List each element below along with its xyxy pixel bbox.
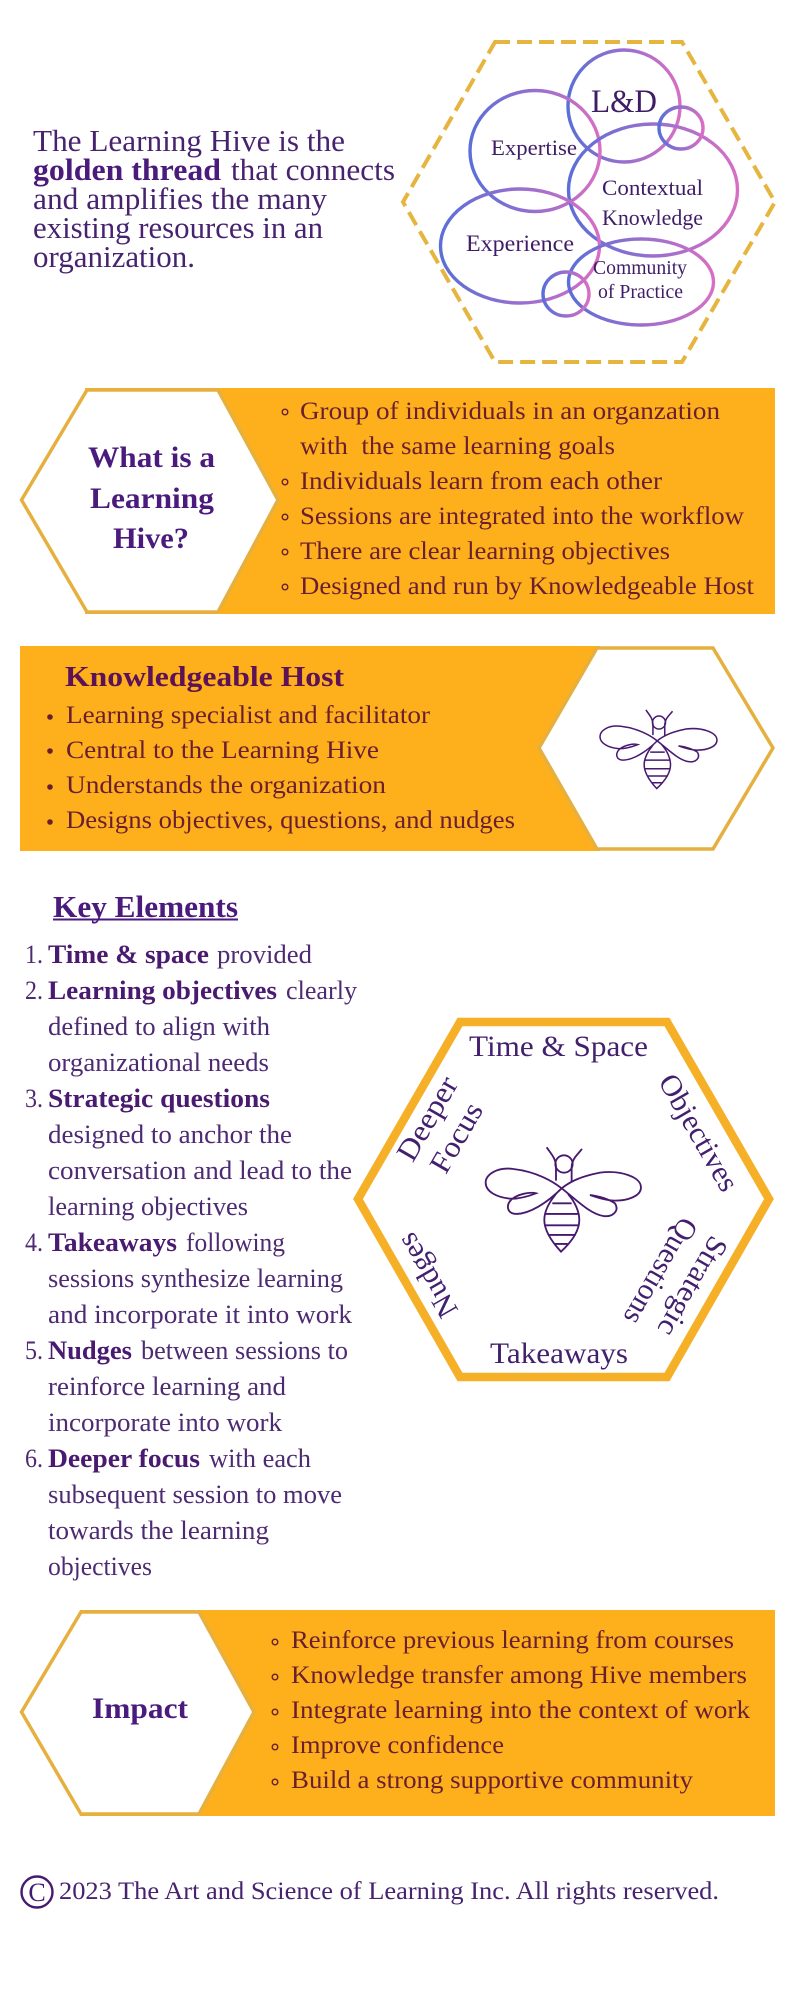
- white hexagon with heading: Impact: [92, 1692, 188, 1725]
- icon: copyright symbol: [22, 1876, 52, 1908]
- numbered list: key elements: with each: [209, 1444, 311, 1473]
- bullet list: Individuals learn from each other: [300, 468, 663, 495]
- orange band: [85, 388, 775, 614]
- numbered list: key elements: Takeaways: [48, 1228, 177, 1257]
- numbered list: key elements: 6.: [25, 1444, 43, 1473]
- white hexagon with heading: Hive?: [113, 522, 189, 555]
- label: deeper focus: [390, 1071, 490, 1179]
- bullet list: Group of individuals in an organzation: [300, 398, 721, 425]
- footer: copyright: [22, 1876, 719, 1908]
- numbered list: key elements: provided: [217, 940, 312, 969]
- numbered list: key elements: and incorporate it into work: [48, 1300, 352, 1329]
- icon: large bee: [486, 1147, 641, 1252]
- numbered list: key elements: Time & space: [48, 940, 209, 969]
- circles: [440, 50, 738, 325]
- bullet list: Improve confidence: [291, 1732, 504, 1759]
- bullet list: [272, 1627, 751, 1794]
- numbered list: key elements: sessions synthesize learning: [48, 1264, 343, 1293]
- panel: knowledgeable host: [20, 646, 773, 851]
- intro text: golden thread: [33, 152, 221, 187]
- label: objectives: Objectives: [652, 1068, 745, 1197]
- white hexagon with bee: [539, 648, 773, 849]
- numbered list: key elements: 4.: [25, 1228, 43, 1257]
- circle labels: L&D: [591, 84, 657, 120]
- bullet list: Build a strong supportive community: [291, 1767, 694, 1794]
- numbered list: key elements: subsequent session to move: [48, 1480, 342, 1509]
- numbered list: key elements: incorporate into work: [48, 1408, 282, 1437]
- panel: what is a learning hive: [22, 388, 775, 614]
- numbered list: key elements: Nudges: [48, 1336, 132, 1365]
- circle labels: Expertise: [491, 135, 577, 160]
- bullet list: [47, 702, 515, 834]
- bullet list: [282, 398, 754, 600]
- label: strategic questions: Strategic: [651, 1230, 734, 1342]
- numbered list: key elements: Deeper focus: [48, 1444, 200, 1473]
- intro text: and amplifies the many: [33, 181, 327, 216]
- label: time and space: Time & Space: [469, 1030, 648, 1063]
- bullet list: Knowledge transfer among Hive members: [291, 1662, 747, 1689]
- label: deeper focus: Deeper: [390, 1071, 465, 1167]
- numbered list: key elements: 1.: [25, 940, 43, 969]
- numbered list: key elements: Strategic questions: [48, 1084, 270, 1113]
- bullet list: Understands the organization: [66, 772, 387, 799]
- orange band: [20, 646, 600, 851]
- numbered list: key elements: designed to anchor the: [48, 1120, 292, 1149]
- intro text: [33, 123, 395, 274]
- white hexagon with heading: What is a: [88, 441, 215, 474]
- circle labels: Experience: [466, 231, 574, 256]
- label: strategic questions: Questions: [617, 1212, 704, 1331]
- numbered list: key elements: following: [186, 1228, 285, 1257]
- diagram: golden thread hexagon with overlapping resource circles: [403, 42, 775, 362]
- dashed hexagon: [403, 42, 775, 362]
- bullet list: Learning specialist and facilitator: [66, 702, 431, 729]
- hexagon outline: [358, 1022, 769, 1377]
- numbered list: key elements: conversation and lead to the: [48, 1156, 352, 1185]
- intro text: that connects: [231, 152, 395, 187]
- numbered list: key elements: towards the learning: [48, 1516, 269, 1545]
- circle labels: Community: [593, 257, 687, 279]
- circle labels: Knowledge: [602, 205, 703, 230]
- intro text: The Learning Hive is the: [33, 123, 345, 158]
- label: nudges: Nudges: [390, 1227, 465, 1323]
- heading: key elements: Key Elements: [53, 889, 238, 924]
- orange band: [80, 1610, 775, 1816]
- numbered list: key elements: reinforce learning and: [48, 1372, 286, 1401]
- numbered list: key elements: [25, 940, 357, 1581]
- label: deeper focus: Focus: [423, 1097, 490, 1179]
- numbered list: key elements: Learning objectives: [48, 976, 277, 1005]
- white hexagon with heading: [22, 1612, 254, 1814]
- white hexagon with heading: [22, 390, 278, 612]
- bullet list: Central to the Learning Hive: [66, 737, 379, 764]
- bullet list: There are clear learning objectives: [300, 538, 670, 565]
- bullet list: with the same learning goals: [300, 433, 615, 460]
- numbered list: key elements: 5.: [25, 1336, 43, 1365]
- bullet list: Sessions are integrated into the workflow: [300, 503, 744, 530]
- numbered list: key elements: objectives: [48, 1552, 152, 1581]
- bullet list: Reinforce previous learning from courses: [291, 1627, 734, 1654]
- circle labels: of Practice: [598, 281, 683, 303]
- heading: Knowledgeable Host: [65, 661, 344, 693]
- white hexagon with heading: Learning: [90, 482, 214, 515]
- label: strategic questions: [617, 1212, 734, 1342]
- numbered list: key elements: learning objectives: [48, 1192, 248, 1221]
- bullet list: Designs objectives, questions, and nudges: [66, 807, 515, 834]
- bullet list: Integrate learning into the context of work: [291, 1697, 751, 1724]
- numbered list: key elements: organizational needs: [48, 1048, 269, 1077]
- label: takeaways: Takeaways: [490, 1337, 628, 1370]
- intro text: organization.: [33, 239, 195, 274]
- panel: impact: [22, 1610, 775, 1816]
- copyright text: 2023 The Art and Science of Learning Inc. All rights reserved.: [59, 1878, 719, 1905]
- numbered list: key elements: 2.: [25, 976, 43, 1005]
- bullet list: Designed and run by Knowledgeable Host: [300, 573, 754, 600]
- numbered list: key elements: between sessions to: [141, 1336, 348, 1365]
- intro text: existing resources in an: [33, 210, 323, 245]
- icon: copyright symbol: C: [28, 1878, 46, 1907]
- diagram: key elements hexagon: [358, 1022, 769, 1377]
- icon: small bee: [600, 710, 717, 789]
- circle labels: [466, 84, 703, 303]
- numbered list: key elements: 3.: [25, 1084, 43, 1113]
- circle labels: Contextual: [602, 175, 703, 200]
- numbered list: key elements: defined to align with: [48, 1012, 270, 1041]
- numbered list: key elements: clearly: [286, 976, 357, 1005]
